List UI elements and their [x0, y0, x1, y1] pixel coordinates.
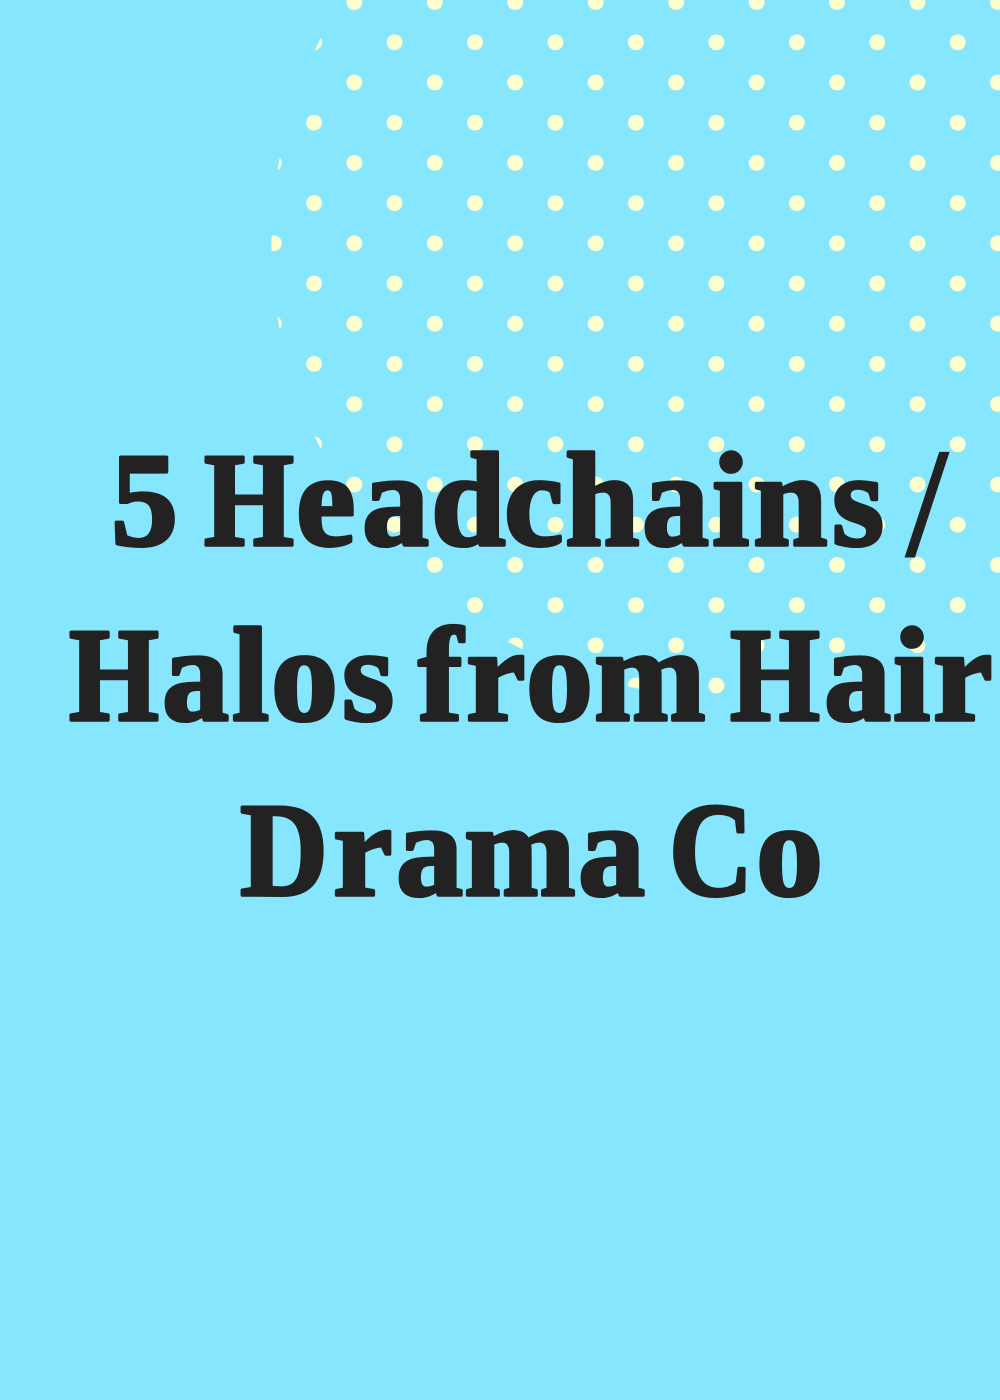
- title: [69, 416, 992, 924]
- title line 3: C: [669, 776, 753, 924]
- title line 1: H: [204, 426, 294, 574]
- title line 2: H: [69, 601, 159, 749]
- title line 2: air: [824, 601, 992, 749]
- title line 2: H: [730, 601, 820, 749]
- title line 3: [240, 776, 823, 924]
- title line 1: [111, 416, 950, 591]
- title line 2: [69, 601, 992, 749]
- title line 1: eadchains: [296, 426, 884, 574]
- title line 3: D: [240, 776, 328, 924]
- title line 3: o: [756, 776, 823, 924]
- title line 2: alos: [162, 601, 394, 749]
- title line 3: rama: [333, 776, 645, 924]
- polka dot circle: [272, 0, 1000, 697]
- title line 1: 5: [111, 426, 178, 574]
- title line 2: from: [418, 601, 706, 749]
- title line 1: /: [904, 416, 950, 591]
